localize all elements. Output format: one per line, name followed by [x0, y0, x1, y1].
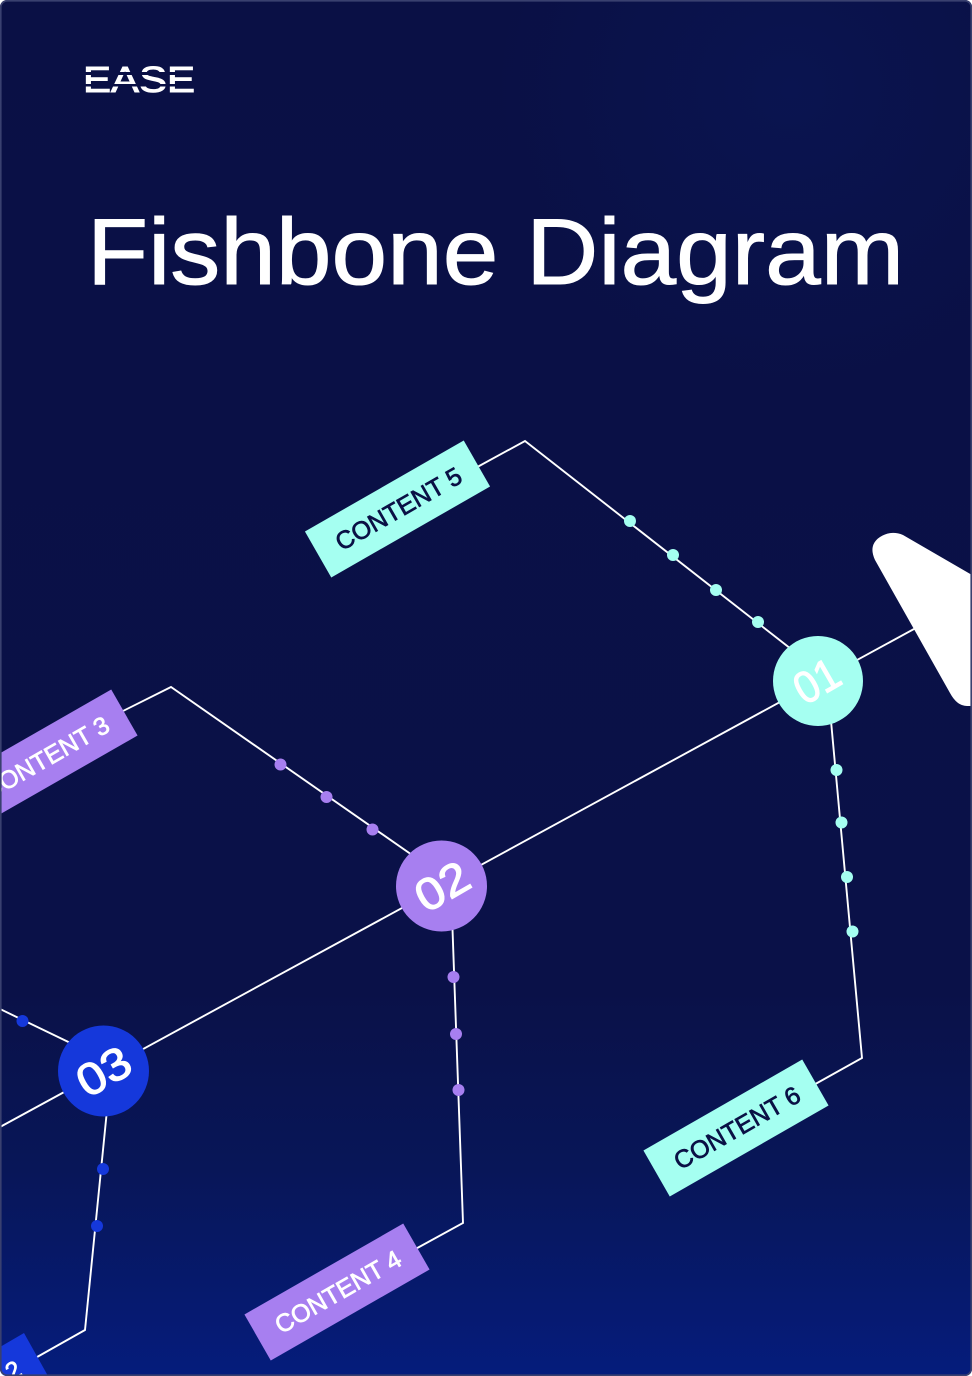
node 01: 01 — [784, 647, 849, 715]
title: Fishbone Diagram — [87, 199, 904, 304]
node 02: 02 — [406, 851, 479, 922]
bone: content 5 — [470, 441, 800, 656]
label: content 4 — [244, 1224, 430, 1360]
label: content 6 — [643, 1060, 829, 1196]
logo: EASE — [86, 66, 194, 93]
icon: fish head — [872, 533, 972, 706]
bone: content 2 — [36, 1116, 109, 1358]
logo: EASE: EASE — [83, 59, 195, 100]
node 01 — [773, 636, 863, 726]
bone: content 4 — [416, 930, 464, 1249]
label: content 6: CONTENT 6 — [669, 1081, 805, 1176]
bone: content 3 — [123, 686, 410, 854]
bone: content 6 — [816, 724, 863, 1084]
label: content 2 — [0, 1333, 48, 1376]
label: content 5 — [305, 441, 490, 577]
label: content 4: CONTENT 4 — [270, 1245, 407, 1340]
node 03 — [58, 1026, 149, 1116]
bone: content 1 — [2, 1008, 70, 1043]
node 02 — [396, 840, 487, 932]
label: content 5: CONTENT 5 — [331, 462, 467, 557]
node 03: 03 — [67, 1036, 140, 1107]
fishbone spine — [0, 623, 925, 1127]
label: content 3 — [2, 690, 138, 814]
